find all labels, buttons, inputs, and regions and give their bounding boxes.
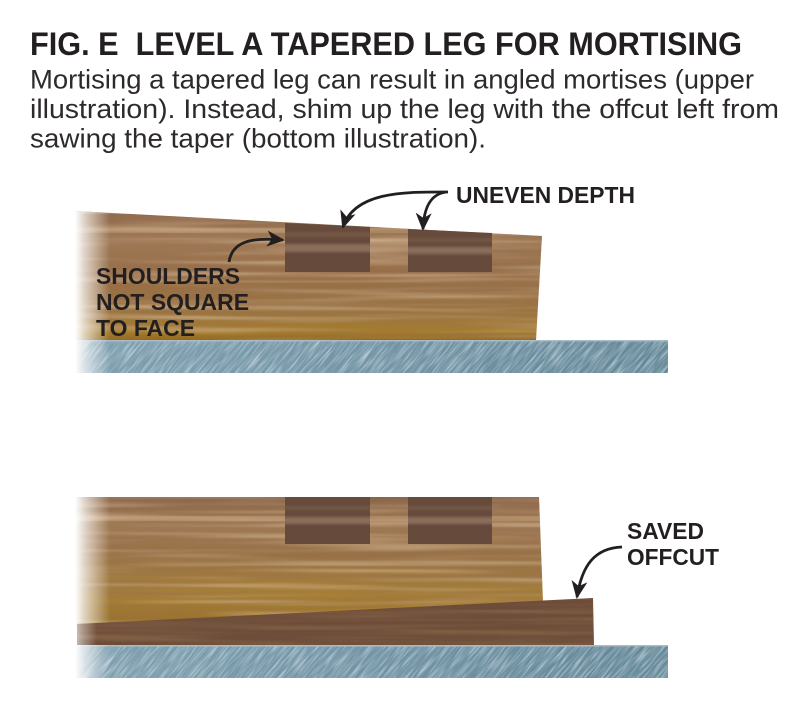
arrow: to offcut: [577, 547, 622, 597]
mortise, left: [285, 497, 370, 544]
title: FIG. E LEVEL A TAPERED LEG FOR MORTISING: [30, 26, 742, 62]
label: shoulders not square to face: TO FACE: [96, 315, 195, 341]
label: saved offcut: SAVED: [627, 518, 704, 544]
offcut shim: [77, 598, 595, 645]
steel surface, upper: [75, 340, 668, 373]
leg, lower: [75, 497, 545, 627]
label: shoulders not square to face: NOT SQUARE: [96, 289, 249, 315]
label: shoulders not square to face: [96, 263, 249, 341]
arrow: to shoulder: [229, 239, 283, 262]
label: shoulders not square to face: SHOULDERS: [96, 263, 240, 289]
steel surface, lower: [75, 645, 668, 678]
intro text: Mortising a tapered leg can result in angled mortises (upper: [30, 64, 754, 94]
arrow: to right mortise: [423, 192, 446, 229]
arrow: to left mortise: [343, 192, 448, 227]
intro text: [30, 64, 779, 154]
mortise, right: [408, 497, 492, 544]
upper illustration: [75, 182, 668, 373]
intro text: illustration). Instead, shim up the leg with the offcut left from: [30, 94, 779, 124]
tapered leg, upper: [75, 205, 545, 340]
label: uneven depth: UNEVEN DEPTH: [456, 182, 635, 208]
intro text: sawing the taper (bottom illustration).: [30, 124, 486, 154]
label: saved offcut: OFFCUT: [627, 544, 719, 570]
label: saved offcut: [627, 518, 719, 570]
mortise, right: [408, 229, 492, 272]
lower illustration: [75, 497, 719, 678]
mortise, left: [285, 223, 370, 272]
